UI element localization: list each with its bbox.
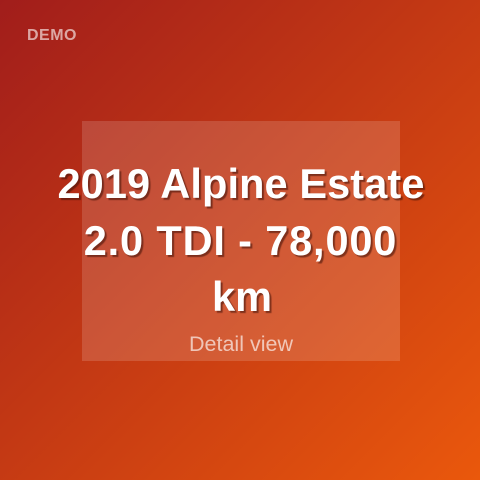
title: km: [212, 273, 272, 320]
title: 2019 Alpine Estate: [57, 160, 424, 207]
title: 2.0 TDI - 78,000: [84, 217, 397, 264]
panel: translucent card: [82, 120, 400, 360]
badge: DEMO: DEMO: [27, 27, 77, 44]
subtitle: Detail view: [189, 332, 293, 356]
title: [57, 160, 426, 320]
